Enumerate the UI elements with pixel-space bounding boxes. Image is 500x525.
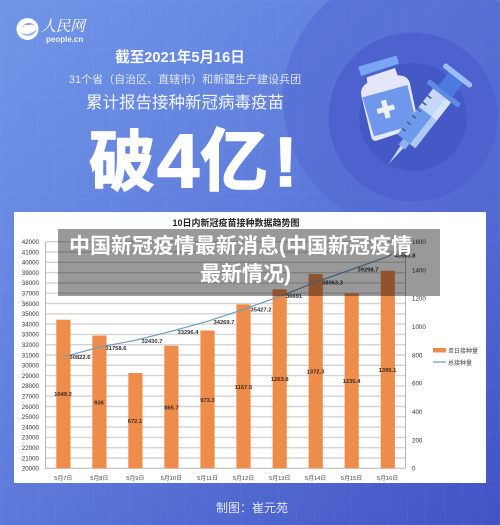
banner title <box>69 234 412 286</box>
line value labels <box>70 254 416 361</box>
right axis labels: 400 <box>412 409 423 416</box>
credit: 制图：崔元苑 <box>216 501 288 515</box>
left axis labels: 36000 <box>22 301 40 308</box>
bar value labels: 1049.2 <box>54 392 72 398</box>
heading: regions: 31个省（自治区、直辖市）和新疆生产建设兵团 <box>69 74 301 86</box>
bar value labels <box>54 368 397 425</box>
line value labels: 38063.3 <box>322 280 344 286</box>
left axis labels: 21000 <box>22 455 40 462</box>
chart title: 10日内新冠疫苗接种数据趋势图 <box>172 217 300 228</box>
date labels: 5月9日 <box>126 475 144 482</box>
heading: date: 截至2021年5月16日 <box>115 50 245 66</box>
right axis labels: 800 <box>412 352 423 359</box>
line value labels: 34269.7 <box>214 320 234 326</box>
bar value labels: 1263.8 <box>271 377 289 383</box>
headline: over 400 million <box>89 119 297 204</box>
date labels: 5月15日 <box>341 475 362 482</box>
left axis labels <box>22 239 40 473</box>
date labels: 5月12日 <box>233 475 254 482</box>
legend: 单日接种量 <box>448 347 478 355</box>
left axis labels: 23000 <box>22 435 40 442</box>
heading: cumulative vaccine: 累计报告接种新冠病毒疫苗 <box>86 94 284 112</box>
logo url: people.cn <box>46 35 83 44</box>
left axis labels: 22000 <box>22 445 40 452</box>
right axis labels: 0 <box>412 466 416 473</box>
headline: over 400 million: 4 <box>157 119 199 204</box>
line value labels: 39298.7 <box>358 268 378 274</box>
line value labels: 30822.6 <box>70 355 91 361</box>
line value labels: 36691 <box>286 294 303 300</box>
left axis labels: 28000 <box>22 383 40 390</box>
date labels: 5月10日 <box>161 475 182 482</box>
left axis labels: 30000 <box>22 363 40 370</box>
right axis labels: 600 <box>412 381 423 388</box>
left axis labels: 33000 <box>22 332 40 339</box>
right axis labels: 1600 <box>412 239 426 246</box>
line value labels: 40553.8 <box>395 254 416 260</box>
bar value labels: 865.7 <box>164 406 179 412</box>
left axis labels: 35000 <box>22 311 40 318</box>
banner title: 最新情况) <box>200 263 291 286</box>
logo: people.cn <box>16 15 87 44</box>
date labels: 5月11日 <box>197 475 218 482</box>
date labels: 5月14日 <box>305 475 326 482</box>
headline: over 400 million: ! <box>274 123 297 201</box>
legend: 总接种量 <box>448 359 472 367</box>
bars: daily doses <box>56 271 395 468</box>
left axis labels: 37000 <box>22 290 40 298</box>
left axis labels: 31000 <box>22 352 40 359</box>
right axis labels <box>412 239 426 473</box>
line: cumulative doses <box>63 254 392 357</box>
right axis labels: 1400 <box>412 267 426 274</box>
left axis labels: 29000 <box>22 373 40 380</box>
right axis labels: 1000 <box>412 324 426 331</box>
date labels: 5月7日 <box>54 475 72 482</box>
bar value labels: 672.1 <box>128 419 143 425</box>
bar value labels: 1372.3 <box>307 370 325 376</box>
legend <box>433 347 478 367</box>
banner title: 中国新冠疫情最新消息(中国新冠疫情 <box>69 235 412 258</box>
bar value labels: 973.3 <box>200 398 216 404</box>
date labels: 5月8日 <box>90 475 108 482</box>
bar value labels: 1157.5 <box>235 385 253 391</box>
left axis labels: 27000 <box>22 394 40 400</box>
left axis labels: 42000 <box>22 239 40 246</box>
line value labels: 33296.4 <box>178 330 199 336</box>
left axis labels: 38000 <box>22 280 40 287</box>
date labels: 5月16日 <box>377 475 398 482</box>
left axis labels: 25000 <box>22 414 40 421</box>
line value labels: 35427.2 <box>251 308 271 314</box>
left axis labels: 24000 <box>22 424 40 431</box>
right axis labels: 1200 <box>412 296 426 303</box>
left axis labels: 26000 <box>22 404 40 411</box>
line value labels: 32430.7 <box>142 339 162 345</box>
vial <box>358 56 416 141</box>
left axis labels: 41000 <box>22 249 40 256</box>
left axis labels: 39000 <box>22 270 40 277</box>
bar value labels: 1235.4 <box>343 379 361 385</box>
syringe <box>373 61 475 177</box>
left axis labels: 34000 <box>22 321 40 328</box>
date labels <box>54 475 398 482</box>
headline: over 400 million: 破 <box>89 125 155 199</box>
left axis labels: 32000 <box>22 342 40 349</box>
line value labels: 31758.6 <box>106 346 127 352</box>
date labels: 5月13日 <box>269 475 290 482</box>
logo name: 人民网 <box>41 15 85 36</box>
bar chart and line chart <box>22 239 426 482</box>
left axis labels: 40000 <box>22 260 40 267</box>
bar value labels: 1395.1 <box>379 368 397 374</box>
headline: over 400 million: 亿 <box>200 124 268 200</box>
left axis labels: 20000 <box>22 466 40 473</box>
overlay: news title banner <box>58 229 440 296</box>
right axis labels: 200 <box>412 437 423 444</box>
bar value labels: 936 <box>94 401 105 407</box>
logo swirl icon <box>16 18 38 40</box>
